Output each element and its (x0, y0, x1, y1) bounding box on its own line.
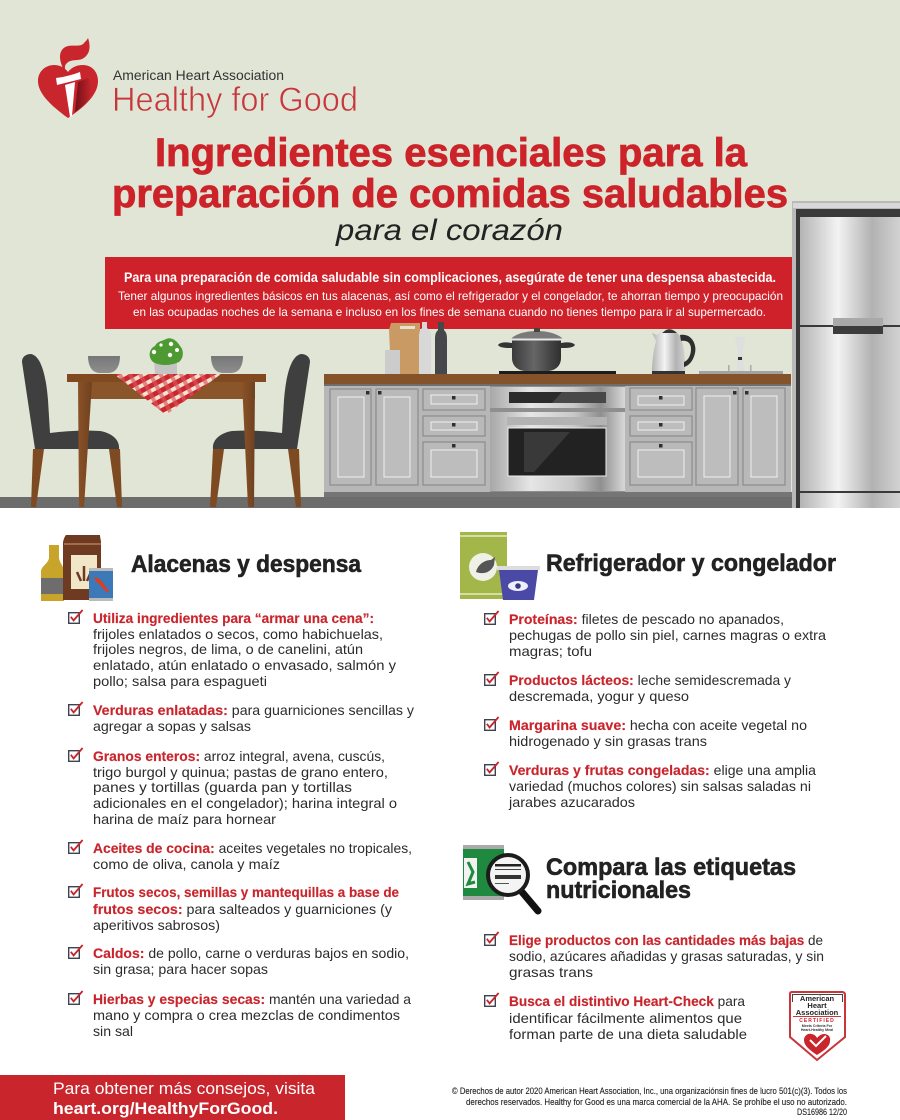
list item: distintivo heart-check: forman parte de una dieta saludable (509, 1027, 747, 1042)
checkbox (69, 884, 83, 897)
icon: heart and torch (38, 38, 98, 118)
intro banner: Para una preparación de comida saludable sin complicaciones, asegúrate de tener una despensa abastecida. (124, 270, 776, 285)
intro banner (105, 257, 792, 329)
list item: granos enteros: panes y tortillas (guarda pan y tortillas (93, 780, 352, 795)
heading: Alacenas y despensa: Alacenas y despensa (131, 551, 362, 578)
checkbox (69, 840, 83, 853)
tablecloth (114, 374, 221, 415)
list item: armar una cena (69, 610, 396, 689)
heading: Compara las etiquetas nutricionales: Compara las etiquetas (546, 854, 796, 881)
checkbox (69, 702, 83, 715)
checkbox (69, 748, 83, 761)
list item: margarina suave: hidrogenado y sin grasas trans (509, 734, 707, 749)
list item: elige productos: sodio, azúcares añadidas y grasas saturadas, y sin (509, 949, 824, 964)
oven (490, 386, 625, 492)
chair right (210, 354, 310, 507)
subtitle: para el corazón (335, 214, 563, 247)
icon: can with magnifying glass (463, 845, 538, 911)
legal text: © Derechos de autor 2020 American Heart Association, Inc., una organizaciónsin fines de lucro 501(c)(3). Todos los (452, 1086, 848, 1096)
heading: Compara las etiquetas nutricionales: nutricionales (546, 877, 691, 904)
checkbox (485, 717, 499, 730)
list item: armar una cena: enlatado, atún enlatado o envasado, salmón y (93, 658, 396, 673)
list item: caldos (69, 945, 409, 977)
list item: productos lacteos: Productos lácteos: leche semidescremada y (509, 673, 791, 688)
list item: hierbas y especias: Hierbas y especias secas: mantén una variedad a (93, 992, 411, 1007)
panel: alacenas y despensa (41, 535, 414, 1039)
checkbox (485, 611, 499, 624)
list item: granos enteros: harina de maíz para hornear (93, 812, 276, 827)
logo: American Heart Association Healthy for Good (38, 38, 358, 119)
title (112, 131, 788, 247)
list item: armar una cena: frijoles negros, de lima, o de canelini, atún (93, 642, 363, 657)
floor (0, 497, 792, 508)
panel: refrigerador y congelador (460, 532, 836, 810)
checkbox (69, 945, 83, 958)
footer call to action: Para obtener más consejos, visita (53, 1080, 316, 1098)
list item: productos lacteos: descremada, yogur y queso (509, 689, 689, 704)
panel: compara las etiquetas nutricionales (463, 845, 845, 1060)
list item: aceites de cocina (69, 840, 412, 872)
bowls (88, 356, 120, 373)
intro banner: en las ocupadas noches de la semana e incluso en los fines de semana cuando no tienes tiempo para ir al supermercado. (133, 305, 766, 319)
list item: productos lacteos (485, 672, 791, 704)
badge: Heart-Check certified (790, 992, 845, 1060)
list item: proteinas: pechugas de pollo sin piel, carnes magras o extra (509, 628, 826, 643)
list item: armar una cena: Utiliza ingredientes para “armar una cena”: (93, 611, 374, 626)
wall background (0, 0, 900, 508)
list item: verduras enlatadas (69, 702, 414, 734)
list item: frutos secos (69, 884, 399, 933)
icon: pantry items (41, 535, 113, 601)
checkbox (485, 932, 499, 945)
list item: verduras enlatadas: Verduras enlatadas: para guarniciones sencillas y (93, 703, 414, 718)
badge: Heart-Check certified: Heart (807, 1001, 827, 1010)
cabinets and counter (324, 374, 792, 497)
badge: Heart-Check certified: Heart-Healthy Meal (801, 1028, 833, 1032)
list item: hierbas y especias: mano y compra o crea mezclas de condimentos (93, 1008, 400, 1023)
list item: verduras y frutas congeladas: jarabes azucarados (508, 795, 635, 810)
list item: margarina suave (485, 717, 807, 749)
list item: granos enteros: Granos enteros: arroz integral, avena, cuscús, (93, 749, 385, 764)
footer call to action: heart.org/HealthyForGood. (53, 1100, 278, 1118)
list item: verduras y frutas congeladas: variedad (muchos colores) sin salsas saladas ni (509, 779, 811, 794)
list item: caldos: Caldos: de pollo, carne o verduras bajos en sodio, (93, 946, 409, 961)
list item: verduras enlatadas: agregar a sopas y salsas (93, 719, 251, 734)
cutting board, jar and bottles (385, 322, 447, 374)
list item: elige productos: Elige productos con las cantidades más bajas de (509, 933, 823, 948)
title: Ingredientes esenciales para la (155, 131, 748, 175)
plant (150, 338, 183, 374)
list item: aceites de cocina: Aceites de cocina: aceites vegetales no tropicales, (93, 841, 412, 856)
list item: caldos: sin grasa; para hacer sopas (93, 962, 268, 977)
refrigerator (792, 201, 900, 508)
badge: Heart-Check certified: Association (796, 1008, 839, 1017)
list item: frutos secos: Frutos secos, semillas y mantequillas a base de (93, 885, 399, 900)
icon: frozen fish bag and yogurt (460, 532, 540, 600)
checkbox (485, 672, 499, 685)
list item: hierbas y especias: sin sal (93, 1024, 133, 1039)
checkbox (69, 610, 83, 623)
checkbox (485, 762, 499, 775)
list item: granos enteros: adicionales en el congelador); harina integral o (93, 796, 397, 811)
title: preparación de comidas saludables (112, 172, 788, 216)
list item: frutos secos: aperitivos sabrosos) (93, 918, 220, 933)
faucet and sink (699, 337, 783, 374)
list item: frutos secos: frutos secos: para salteados y guarniciones (y (93, 902, 392, 917)
footer call to action (0, 1075, 345, 1120)
list item: distintivo heart-check: Busca el distintivo Heart-Check para (509, 994, 745, 1009)
kitchen illustration (0, 201, 900, 508)
legal text: derechos reservados. Healthy for Good es una marca comercial de la AHA. Se prohíbe el uso no autorizado. (466, 1097, 847, 1107)
list item: elige productos (485, 932, 824, 980)
list item: proteinas (485, 611, 826, 659)
list item: proteinas: Proteínas: filetes de pescado no apanados, (509, 612, 784, 627)
list item: margarina suave: Margarina suave: hecha con aceite vegetal no (509, 718, 807, 733)
list item: hierbas y especias (69, 991, 411, 1039)
badge: Heart-Check certified: Meets Criteria For (802, 1024, 833, 1028)
legal text (452, 1086, 848, 1117)
logo text: Healthy for Good: Healthy for Good (112, 81, 358, 119)
badge: Heart-Check certified: CERTIFIED (799, 1018, 835, 1024)
list item: granos enteros (69, 748, 397, 827)
cooktop and pot (498, 328, 616, 374)
list item: proteinas: magras; tofu (509, 644, 592, 659)
heading: Compara las etiquetas nutricionales (546, 854, 796, 904)
chair left (22, 354, 122, 507)
legal text: DS16986 12/20 (797, 1107, 847, 1117)
badge: Heart-Check certified: American (800, 994, 835, 1003)
list item: distintivo heart-check (485, 993, 747, 1042)
checkbox (485, 993, 499, 1006)
kettle (652, 329, 695, 374)
list item: distintivo heart-check: identificar fácilmente alimentos que (509, 1011, 742, 1026)
list item: armar una cena: pollo; salsa para espagueti (93, 674, 267, 689)
list item: verduras y frutas congeladas (485, 762, 816, 810)
list item: aceites de cocina: como de oliva, canola y maíz (93, 857, 280, 872)
checkbox (69, 991, 83, 1004)
heading: Refrigerador y congelador: Refrigerador y congelador (546, 550, 836, 577)
list item: armar una cena: frijoles enlatados o secos, como habichuelas, (93, 627, 383, 642)
list item: elige productos: grasas trans (509, 965, 593, 980)
dining table (67, 338, 266, 507)
logo text: American Heart Association: American Heart Association (113, 68, 284, 83)
intro banner: Tener algunos ingredientes básicos en tus alacenas, así como el refrigerador y el congelador, te ahorran tiempo y preocupación (118, 289, 783, 303)
list item: verduras y frutas congeladas: Verduras y frutas congeladas: elige una amplia (509, 763, 816, 778)
list item: granos enteros: trigo burgol y quinua; pastas de grano entero, (93, 765, 388, 780)
